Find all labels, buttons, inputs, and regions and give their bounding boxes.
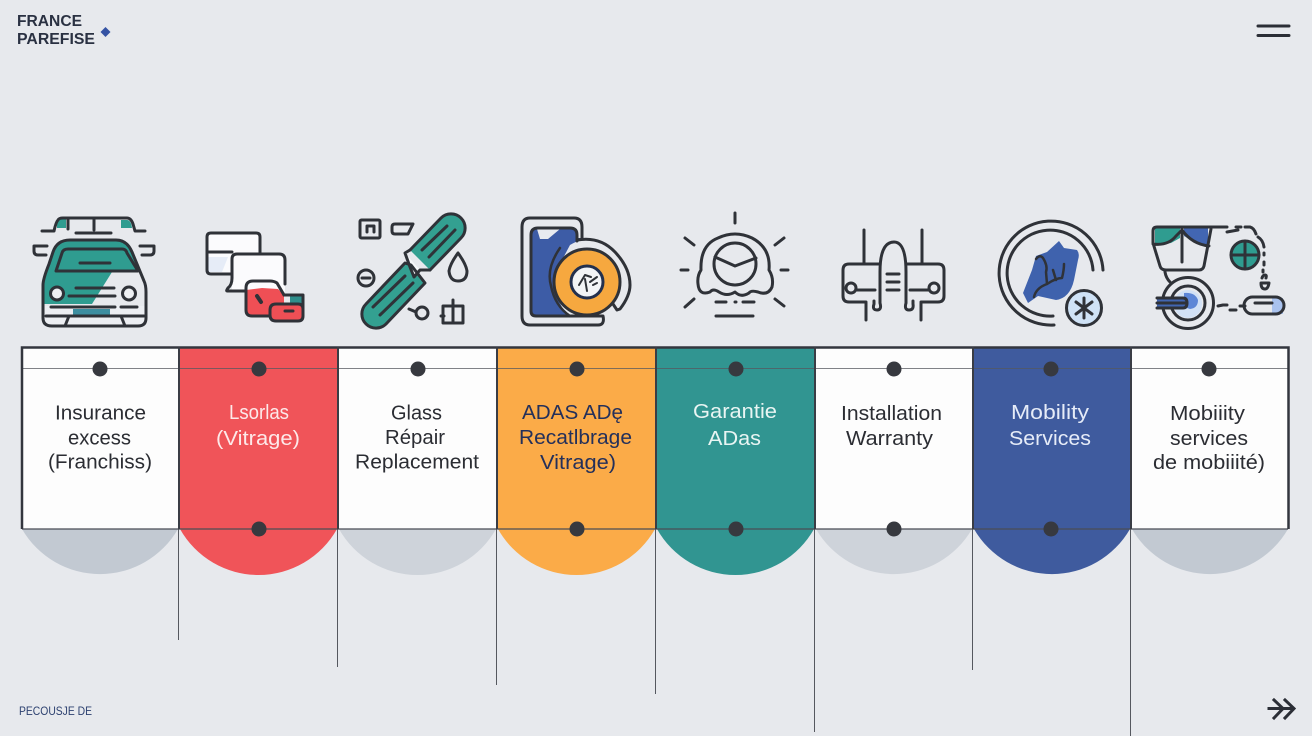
label: Garantie ADas	[693, 400, 777, 450]
label: Vitrage	[216, 401, 300, 450]
icon: ADAS dial	[522, 218, 630, 325]
icon: screwdriver tools	[358, 214, 467, 328]
label: Mobility Services	[1009, 401, 1091, 450]
label: Insurance excess: Insurance	[55, 402, 146, 424]
label: ADAS recalibrage: Vitrage)	[540, 451, 616, 474]
label: Mobility Services: Mobility	[1011, 401, 1090, 424]
logo: France Parefise	[17, 13, 110, 48]
label: Insurance excess	[48, 402, 152, 474]
logo: France Parefise: PAREFISE	[17, 31, 95, 48]
card fills	[21, 347, 1289, 529]
label: ADAS recalibrage: Recatlbrage	[519, 426, 632, 449]
label: Mobility services de mobilite: services	[1170, 427, 1248, 450]
label: Mobility services de mobilite: de mobiiité)	[1153, 451, 1265, 474]
icon: installation connectors	[843, 230, 944, 320]
logo: France Parefise: FRANCE	[17, 13, 82, 30]
label: Garantie ADas: Garantie	[693, 400, 777, 423]
label: Mobility Services: Services	[1009, 427, 1091, 450]
label: Vitrage: (Vitrage)	[216, 427, 300, 450]
label: Glass Repair Replacement: Répair	[385, 426, 445, 449]
icon: mobility map with asterisk	[999, 221, 1103, 326]
label: Insurance excess: (Franchiss)	[48, 450, 152, 474]
footer text: PECOUSJE DE	[19, 704, 92, 718]
label: Glass Repair Replacement: Glass	[391, 402, 442, 424]
icon: mobility service diagram	[1153, 227, 1284, 328]
semicircle tabs	[22, 529, 1288, 575]
label: Mobility services de mobilite	[1153, 402, 1265, 474]
label: Vitrage: Lsorlas	[229, 401, 289, 424]
icon: warranty bell with rays	[681, 213, 788, 316]
icon: chat windows and red glass	[207, 233, 303, 321]
grid lines	[22, 347, 1288, 529]
vertical drop lines	[178, 529, 1130, 736]
label: Mobility services de mobilite: Mobiiity	[1170, 402, 1246, 425]
panel: segmented cards	[21, 347, 1289, 736]
label: Installation Warranty: Warranty	[846, 427, 934, 450]
label: Glass Repair Replacement	[355, 402, 479, 474]
label: Installation Warranty: Installation	[841, 402, 942, 425]
icon: double arrow	[1269, 700, 1294, 718]
label: Installation Warranty	[841, 402, 942, 450]
icon: menu	[1258, 26, 1289, 36]
label: ADAS recalibrage: ADAS ADę	[522, 401, 623, 424]
label: Garantie ADas: ADas	[708, 427, 761, 450]
top dots	[92, 362, 1216, 376]
bottom dots	[252, 522, 1058, 536]
label: Glass Repair Replacement: Replacement	[355, 450, 479, 474]
label: ADAS recalibrage	[519, 401, 632, 474]
label: Insurance excess: excess	[68, 426, 131, 450]
icon: car	[34, 218, 154, 326]
